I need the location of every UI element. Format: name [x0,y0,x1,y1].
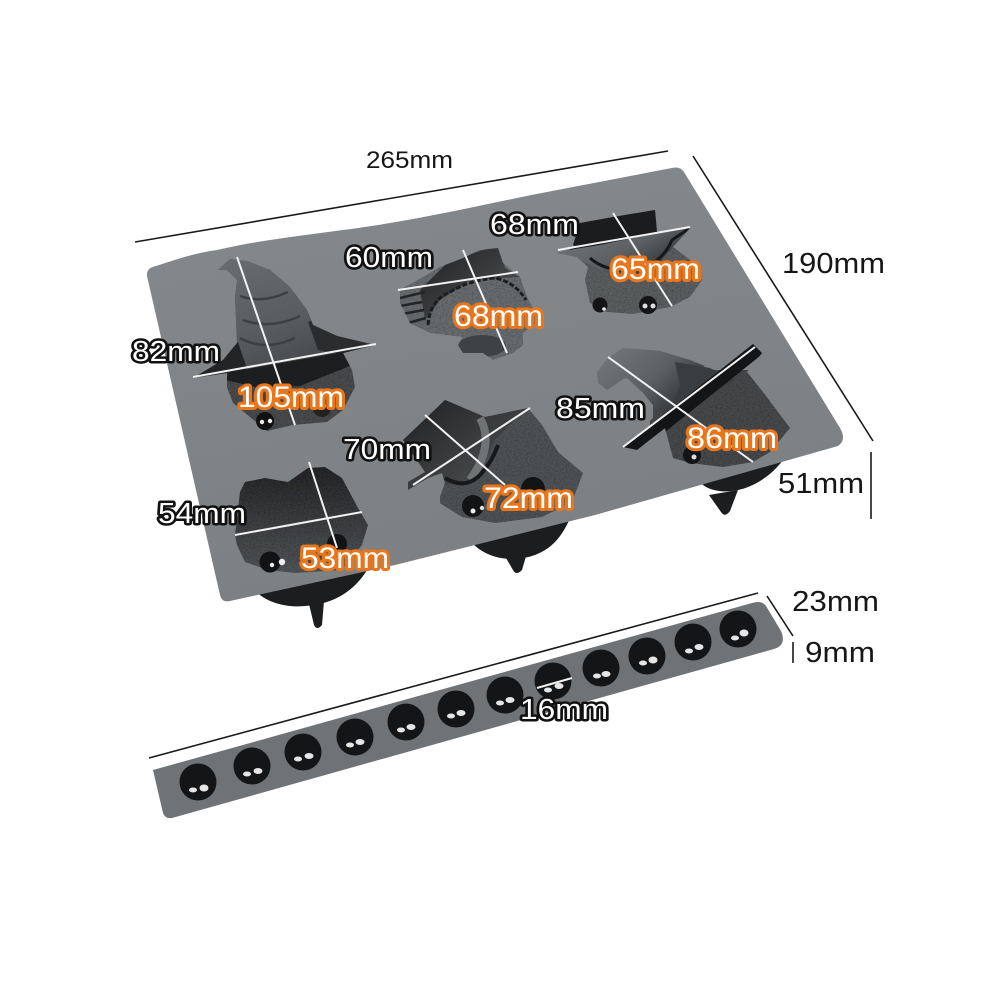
fur base [440,400,590,530]
dimension line: 265mm [135,151,668,242]
cavity: hat 70×72 [403,400,583,523]
label: 105mm: 105mm [238,381,344,414]
label: 51mm: 51mm [778,468,864,500]
eyes: hat 68×65 cavity [592,296,657,314]
panel: eye strip [153,602,783,818]
feet [458,335,506,357]
cauldron underside and legs [250,450,790,628]
label: 68mm top: 68mm [490,209,579,241]
eyes: hat 70×72 cavity [462,477,545,517]
strip body [153,602,783,818]
fur base [558,210,702,314]
label: 72mm: 72mm [484,482,573,515]
dark top band [420,245,520,320]
panel: silicone tray [147,168,843,601]
label: 65mm: 65mm [611,253,700,286]
label: 86mm: 86mm [687,422,777,455]
hat [597,348,704,414]
hat fold [559,229,687,274]
dimension line: 51mm [870,452,872,519]
rim teeth [400,292,426,323]
scalloped rim [428,278,526,325]
hat folds [240,292,300,345]
label: 82mm: 82mm [132,336,220,368]
left brim wing [194,342,247,378]
label: 23mm: 23mm [792,586,879,618]
hat rim [445,445,498,483]
eyes: cat face cavity [260,534,347,572]
hat dark panel [403,400,527,490]
dimension line: 9mm [792,642,794,663]
dimension line: 190mm [693,156,873,441]
cavity: hat 85×86 [597,344,790,467]
cavity: cauldron 60×68 [400,248,535,360]
label: 265mm: 265mm [366,147,453,174]
eye cavities [180,610,756,800]
brim band [225,350,360,388]
right brim wing [308,321,373,354]
label: 70mm: 70mm [343,434,431,466]
label: 68mm orange: 68mm [454,300,543,333]
hat rim stroke [590,228,690,270]
dimension line: strip length [149,593,758,758]
eye: hat 85×86 cavity [683,446,701,464]
eye highlights [189,630,748,792]
hat shadow [675,362,734,392]
fur base [650,370,790,467]
tray surface [147,168,843,601]
hat cone [218,259,323,368]
measurement line: 16mm [537,678,572,688]
measurement lines on tray [193,213,755,548]
label: 190mm: 190mm [782,248,885,280]
base [400,248,535,360]
label: 54mm: 54mm [158,498,246,530]
label: 16mm: 16mm [520,694,608,726]
label: 60mm: 60mm [345,242,433,274]
cavity: witch hat 82×105 [194,259,375,431]
label: 9mm: 9mm [805,637,875,669]
eyes: witch hat cavity [256,399,331,430]
label: 53mm: 53mm [301,542,389,575]
label: 85mm: 85mm [556,393,645,425]
cavity: cat face 54×53 [235,467,368,573]
hat fold shading [470,418,486,480]
black brim band [623,344,765,452]
dimension line: 23mm [767,596,793,636]
fur [235,467,368,573]
cavity: hat 68×65 [558,210,702,314]
dark top [570,210,657,250]
fur base [195,259,372,431]
